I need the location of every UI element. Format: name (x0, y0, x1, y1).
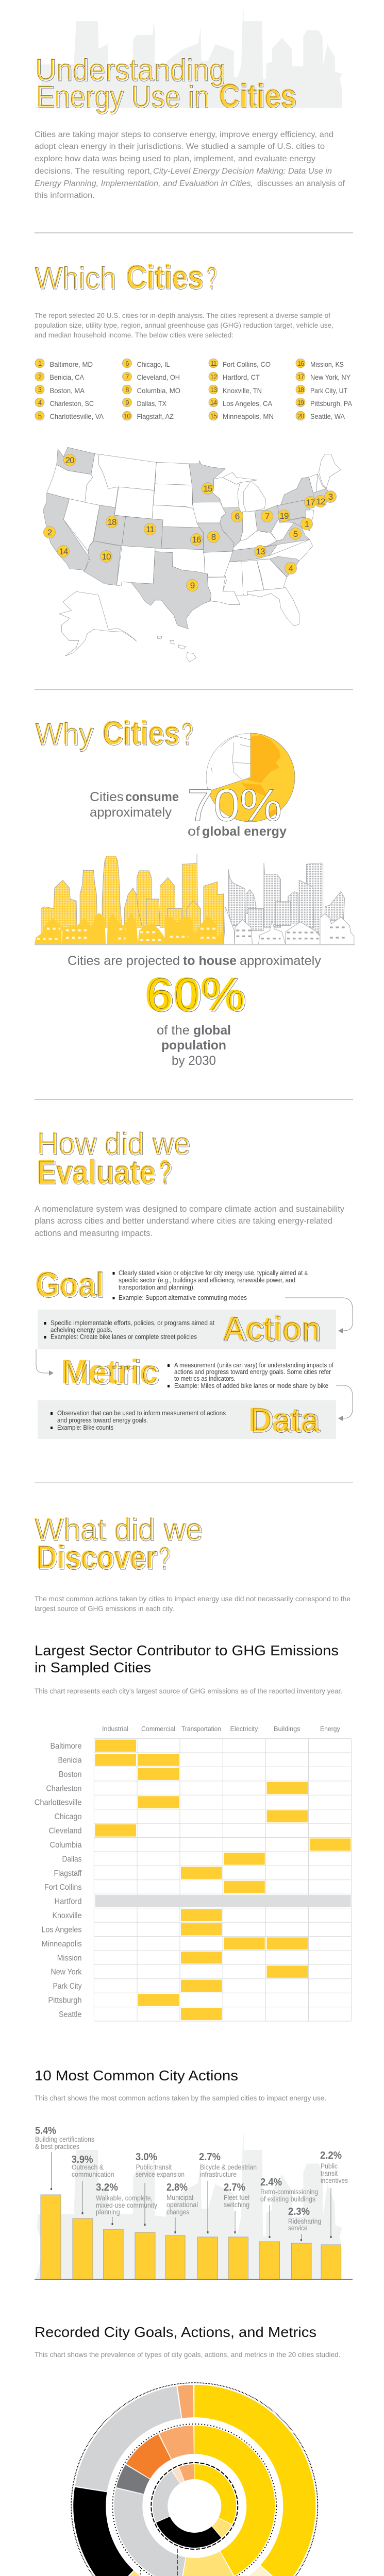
common actions heading: 10 Most Common City Actions (35, 2067, 238, 2083)
discover paragraph: largest source of GHG emissions in each city. (35, 1604, 174, 1613)
heading: why cities: Cities (103, 715, 180, 752)
US map (43, 447, 341, 662)
list column 4: New York, NY (310, 373, 351, 381)
heading: how did we evaluate: How did we (38, 1127, 191, 1161)
action 3.9 percent label: 3.9% (71, 2154, 93, 2165)
data block (38, 1400, 336, 1439)
list column 4: 18 (297, 386, 304, 394)
metrics label and leader (162, 2549, 193, 2576)
map markers: 15 (204, 484, 212, 494)
actions ring (104, 2415, 286, 2576)
list column 1: 5 (38, 412, 42, 420)
action 2.7 percent fleet label (224, 2182, 249, 2209)
intro paragraph: discusses an analysis of (257, 179, 345, 188)
city skyline half yellow (35, 854, 355, 945)
intro paragraph (35, 130, 345, 200)
action 2.4 percent label: Retro-commissioning (260, 2188, 318, 2196)
action 2.7 percent fleet label: Fleet fuel (224, 2193, 249, 2201)
header skyline background (36, 8, 342, 108)
global population text: by 2030 (172, 1054, 216, 1068)
sixty percent figure: 60% (147, 969, 247, 1022)
map markers: 10 (102, 552, 111, 562)
row labels: Benicia (58, 1756, 82, 1765)
action 2.2 percent label: transit (321, 2169, 338, 2177)
metrics ring (146, 2458, 243, 2554)
arrow: action to metric (36, 1349, 54, 1376)
action 2.2 percent label: incentives (321, 2176, 348, 2184)
intro paragraph: City-Level Energy Decision Making: Data Use in (153, 167, 332, 176)
map markers: 2 (47, 528, 52, 537)
main title: Energy Use in (36, 79, 209, 113)
heading: why cities: Why (36, 717, 94, 752)
radial donut chart (46, 2358, 343, 2576)
action 3.0 percent label: Public transit (136, 2163, 172, 2171)
heading: how did we evaluate: ? (160, 1156, 172, 1191)
action word: Action (222, 1309, 320, 1347)
heading: which cities: Which (34, 260, 115, 295)
cities consume text (90, 790, 179, 820)
list column 2 (122, 359, 180, 420)
heading: which cities (34, 258, 217, 296)
metric block (61, 1352, 333, 1392)
darker land areas (241, 735, 280, 818)
map markers: 6 (235, 512, 240, 521)
list column 3: Los Angeles, CA (223, 399, 273, 408)
list column 3: Minneapolis, MN (223, 412, 274, 420)
heading: what did we discover (34, 1512, 203, 1577)
row labels: Chicago (55, 1812, 81, 1821)
map markers: 1 (305, 519, 309, 529)
globe pie chart 70 percent (187, 733, 295, 831)
main title: Cities (219, 77, 296, 114)
goals ring (46, 2358, 343, 2576)
heading: how did we evaluate: How did we (37, 1126, 190, 1160)
global population text: of the (157, 1023, 190, 1038)
list column 1: Charleston, SC (49, 399, 94, 408)
which cities paragraph: and median household income. The below cities were selected: (35, 331, 233, 339)
projected to house text: approximately (240, 954, 321, 968)
discover paragraph (35, 1595, 350, 1613)
action 3.0 percent label (136, 2151, 185, 2178)
filled cells (95, 1740, 350, 2020)
heading: why cities (35, 714, 193, 752)
list column 4: 17 (297, 373, 304, 381)
list column 3: Fort Collins, CO (223, 360, 271, 368)
sector chart heading (35, 1642, 339, 1675)
which cities paragraph (35, 311, 333, 339)
list column 3: 11 (210, 360, 217, 367)
list column 1: 1 (38, 360, 42, 367)
goal bullets: Clearly stated vision or objective for city energy use, typically aimed at a (119, 1269, 308, 1277)
list column 2: Chicago, IL (137, 360, 170, 368)
cities consume text: Cities (90, 790, 124, 804)
action bullets: acheiving energy goals. (51, 1326, 112, 1333)
data bullets: Example: Bike counts (57, 1424, 113, 1431)
heading: what did we discover: ? (158, 1540, 170, 1575)
heading: why cities: Cities (102, 714, 179, 751)
map markers: 5 (293, 529, 298, 539)
list column 4: 20 (297, 412, 304, 420)
yellow foreground houses (35, 913, 224, 944)
projected to house text: to house (183, 954, 237, 968)
arrow: metric to data (336, 1385, 353, 1421)
list column 2: 9 (125, 399, 129, 406)
row labels (35, 1742, 82, 2019)
action 2.3 percent label: Ridesharing (288, 2217, 321, 2225)
main title: Energy Use in (37, 80, 210, 114)
grid (94, 1739, 352, 2021)
metric word: Metric (61, 1352, 158, 1391)
map markers: 12 (316, 497, 325, 506)
list column 4: Pittsburgh, PA (310, 399, 353, 408)
data bullets: and progress toward energy goals. (57, 1417, 148, 1424)
map markers: 18 (108, 517, 116, 527)
list column 2: Columbia, MO (137, 386, 180, 395)
list column 3: 14 (210, 399, 217, 406)
evaluate paragraph: actions and measuring impacts. (35, 1228, 153, 1238)
action 2.8 percent label: changes (166, 2208, 189, 2216)
action word: Action (224, 1310, 322, 1348)
row labels: Baltimore (51, 1742, 81, 1751)
sector matrix chart (35, 1725, 352, 2021)
cities consume text: approximately (90, 805, 172, 820)
action 2.7 percent bicycle label: 2.7% (199, 2151, 221, 2163)
row labels: New York (51, 1968, 82, 1977)
heading: what did we discover: ? (159, 1541, 171, 1576)
row labels: Knoxville (53, 1911, 81, 1920)
list column 2: 10 (124, 412, 130, 420)
row labels: Fort Collins (44, 1883, 82, 1892)
action 3.2 percent label: planning (96, 2208, 120, 2216)
action 5.4 percent label: 5.4% (35, 2125, 56, 2137)
heading: what did we discover: Discover (36, 1538, 156, 1575)
map markers: 14 (59, 547, 68, 556)
data word: Data (248, 1400, 319, 1438)
leader lines (51, 2152, 332, 2241)
chart skyline backdrop (36, 2131, 342, 2279)
list column 3: Hartford, CT (223, 373, 260, 381)
map markers: 19 (280, 511, 289, 521)
action bullets: Examples: Create bike lanes or complete street policies (51, 1333, 197, 1341)
list column 4: Seattle, WA (310, 412, 345, 420)
list column 3: 13 (210, 386, 217, 394)
map markers: 9 (190, 581, 195, 590)
action 3.9 percent label (71, 2154, 114, 2178)
intro paragraph: adopt clean energy in their jurisdictions. We studied a sample of U.S. cities to (35, 142, 325, 151)
map markers: 16 (192, 535, 201, 545)
row labels: Columbia (49, 1841, 82, 1850)
recorded goals heading: Recorded City Goals, Actions, and Metrics (35, 2324, 316, 2340)
row labels: Charleston (46, 1784, 81, 1793)
list column 2: 7 (125, 373, 129, 381)
map markers: 20 (65, 455, 74, 465)
list column 3: 12 (210, 373, 217, 381)
heading: what did we discover: What did we (34, 1512, 202, 1546)
row labels: Boston (59, 1770, 81, 1779)
list column 1: 4 (38, 399, 42, 406)
heading: how did we evaluate: ? (159, 1153, 171, 1190)
heading: which cities: Cities (126, 258, 203, 295)
evaluate paragraph (35, 1204, 344, 1238)
action 2.8 percent label: 2.8% (166, 2182, 188, 2193)
map markers: 13 (256, 547, 265, 556)
which cities paragraph: The report selected 20 U.S. cities for in-depth analysis. The cities represent a diverse sample of (35, 311, 330, 319)
metric bullets: Example: Miles of added bike lanes or mode share by bike (174, 1382, 328, 1389)
main title (35, 52, 297, 115)
row labels: Los Angeles (41, 1926, 82, 1934)
metric bullets: A measurement (units can vary) for understanding impacts of (174, 1362, 333, 1369)
metric bullets: actions and progress toward energy goals. Some cities refer (174, 1368, 331, 1376)
data word: Data (251, 1401, 321, 1439)
recorded goals subtitle: This chart shows the prevalence of types of city goals, actions, and metrics in the 20 cities studied. (35, 2350, 340, 2359)
list column 4: 16 (297, 360, 304, 367)
list column 1: Baltimore, MD (49, 360, 93, 368)
row labels: Minneapolis (41, 1940, 82, 1948)
sector chart subtitle: This chart represents each city’s largest source of GHG emissions as of the reported inventory year. (35, 1687, 342, 1695)
action 5.4 percent label: & best practices (35, 2142, 79, 2150)
action 5.4 percent label (35, 2125, 94, 2150)
list column 3: Knoxville, TN (223, 386, 262, 395)
grey buildings right (224, 863, 354, 944)
list column 1 (35, 359, 104, 420)
main title: Cities (220, 78, 297, 115)
evaluate paragraph: A nomenclature system was designed to compare climate action and sustainability (35, 1204, 344, 1214)
map markers (43, 454, 336, 591)
row labels: Mission (57, 1954, 81, 1962)
action 2.7 percent fleet label: switching (224, 2200, 249, 2209)
action 3.9 percent label: communication (72, 2170, 114, 2178)
row labels: Seattle (59, 2010, 81, 2019)
goal word: Goal (35, 1265, 104, 1304)
column headers: Energy (320, 1725, 340, 1733)
action 2.4 percent label (260, 2177, 318, 2203)
bars (41, 2195, 341, 2279)
map markers: 11 (146, 524, 154, 534)
action 2.8 percent label (166, 2182, 198, 2216)
map markers: 7 (265, 512, 270, 521)
action bullets (44, 1319, 214, 1341)
heading: what did we discover: What did we (35, 1513, 203, 1547)
action 2.7 percent bicycle label: infrastructure (200, 2170, 237, 2178)
map markers: 8 (211, 532, 216, 542)
action 3.0 percent label: 3.0% (136, 2151, 157, 2163)
global population text: global (193, 1023, 231, 1038)
action 2.4 percent label: 2.4% (260, 2177, 282, 2188)
action 3.2 percent label: mixed-use community (96, 2201, 157, 2209)
column headers: Commercial (141, 1725, 175, 1733)
heading: what did we discover: Discover (38, 1539, 158, 1577)
row labels: Hartford (55, 1897, 81, 1906)
row labels: Cleveland (48, 1827, 81, 1835)
list column 4: 19 (297, 399, 304, 406)
row labels: Charlottesville (35, 1799, 81, 1807)
list column 2: 6 (125, 360, 129, 367)
common actions bar chart (35, 2125, 353, 2279)
row labels: Pittsburgh (48, 1996, 81, 2005)
data bullets (51, 1410, 226, 1431)
heading: how did we evaluate (37, 1126, 191, 1191)
main title: Understanding (35, 52, 225, 87)
of global energy text: of (188, 824, 200, 839)
goal word: Goal (37, 1266, 105, 1305)
list column 2: Cleveland, OH (137, 373, 180, 381)
map markers: 17 (306, 498, 315, 507)
column headers: Electricity (230, 1725, 258, 1733)
heading: which cities: ? (206, 260, 216, 295)
metric word: Metric (63, 1353, 160, 1392)
data bullets: Observation that can be used to inform measurement of actions (57, 1410, 226, 1417)
sixty percent figure: 60% (145, 968, 245, 1021)
intro paragraph: explore how data was being used to plan, implement, and evaluate energy (35, 155, 315, 163)
evaluate paragraph: plans across cities and better understand where cities are taking energy-related (35, 1216, 332, 1226)
row labels: Dallas (62, 1855, 82, 1863)
north america outline (211, 736, 251, 779)
action bullets: Specific implementable efforts, policies, or programs aimed at (51, 1319, 214, 1327)
action 5.4 percent label: Building certifications (35, 2135, 94, 2143)
goal bullets: transportation and planning). (119, 1284, 195, 1291)
list column 1: Benicia, CA (49, 373, 85, 381)
action 2.7 percent bicycle label (199, 2151, 257, 2178)
sector chart heading: Largest Sector Contributor to GHG Emissions (35, 1642, 339, 1658)
column headers: Transportation (181, 1725, 221, 1733)
global population text: population (161, 1038, 226, 1053)
heading: why cities: Why (35, 716, 93, 751)
projected to house text: Cities are projected (68, 954, 180, 968)
action 2.7 percent fleet label: 2.7% (224, 2182, 245, 2193)
list column 2: Flagstaff, AZ (137, 412, 174, 420)
actions label and leader (126, 2567, 158, 2576)
yellow house windows (37, 929, 216, 940)
action 2.2 percent label: Public (321, 2162, 338, 2170)
list column 4: Park City, UT (310, 386, 347, 395)
city list (35, 359, 353, 420)
column headers (102, 1725, 340, 1733)
goal bullets: specific sector (e.g., buildings and efficiency, renewable power, and (119, 1277, 295, 1284)
heading: which cities: ? (207, 261, 217, 296)
global population text (157, 1023, 231, 1068)
goal block (35, 1265, 308, 1305)
intro paragraph: this information. (35, 191, 95, 200)
map markers: 4 (289, 564, 293, 573)
action 3.2 percent label (96, 2182, 157, 2216)
heading: how did we evaluate: Evaluate (38, 1154, 156, 1191)
row labels: Flagstaff (54, 1869, 82, 1878)
list column 2: Dallas, TX (137, 399, 167, 408)
metric bullets: to metrics as indicators. (174, 1375, 236, 1382)
action 2.4 percent label: of existing buildings (260, 2195, 315, 2203)
action block (38, 1309, 336, 1349)
intro paragraph: Energy Planning, Implementation, and Evaluation in Cities, (35, 179, 253, 188)
list column 2: 8 (125, 386, 129, 394)
grey windows (236, 927, 347, 939)
list column 1: Charlottesville, VA (49, 412, 104, 420)
discover paragraph: The most common actions taken by cities to impact energy use did not necessarily correspond to the (35, 1595, 350, 1603)
metric bullets (168, 1362, 333, 1389)
action 2.8 percent label: operational (166, 2200, 198, 2209)
action 2.2 percent label (320, 2150, 348, 2184)
sector chart heading: in Sampled Cities (35, 1659, 151, 1675)
list column 1: 3 (38, 386, 42, 394)
action 3.9 percent label: Outreach & (72, 2163, 104, 2171)
intro paragraph: decisions. The resulting report, (35, 167, 152, 176)
yellow towers (41, 854, 224, 944)
action 2.3 percent label: service (288, 2224, 308, 2232)
heading: which cities: Which (35, 261, 116, 296)
list column 4 (296, 359, 353, 420)
heading: why cities: ? (182, 717, 193, 752)
common actions subtitle: This chart shows the most common actions taken by the sampled cities to impact energy use. (35, 2094, 326, 2102)
action 2.3 percent label (288, 2206, 321, 2232)
list column 4: Mission, KS (310, 360, 344, 368)
map markers: 3 (328, 492, 333, 502)
action 3.2 percent label: 3.2% (96, 2182, 118, 2193)
action 3.0 percent label: service expansion (136, 2170, 185, 2178)
arrow: goal to action (285, 1298, 353, 1333)
intro paragraph: Cities are taking major steps to conserve energy, improve energy efficiency, and (35, 130, 333, 139)
goal bullets (112, 1269, 308, 1301)
which cities paragraph: population size, utility type, region, annual greenhouse gas (GHG) reduction target, vehicle use, (35, 321, 333, 329)
list column 1: Boston, MA (49, 386, 85, 395)
list column 1: 2 (38, 373, 42, 381)
action 2.8 percent label: Municipal (166, 2193, 193, 2201)
action 3.2 percent label: Walkable, complete, (96, 2194, 153, 2202)
column headers: Industrial (102, 1725, 128, 1733)
action 2.7 percent bicycle label: Bicycle & pedestrian (200, 2163, 257, 2171)
column headers: Buildings (274, 1725, 300, 1733)
projected to house text (68, 954, 321, 968)
heading: why cities: ? (181, 716, 192, 751)
goal bullets: Example: Support alternative commuting modes (119, 1294, 247, 1301)
list column 3: 15 (210, 412, 217, 420)
heading: how did we evaluate: Evaluate (37, 1153, 155, 1190)
of global energy text: global energy (202, 824, 287, 839)
heading: which cities: Cities (127, 259, 204, 296)
list column 3 (209, 359, 274, 420)
action 2.3 percent label: 2.3% (288, 2206, 310, 2217)
main title: Understanding (36, 53, 226, 88)
row labels: Park City (53, 1982, 82, 1991)
action 2.2 percent label: 2.2% (320, 2150, 342, 2161)
seventy percent figure: 70% (187, 779, 282, 831)
cities consume text: consume (125, 790, 179, 804)
